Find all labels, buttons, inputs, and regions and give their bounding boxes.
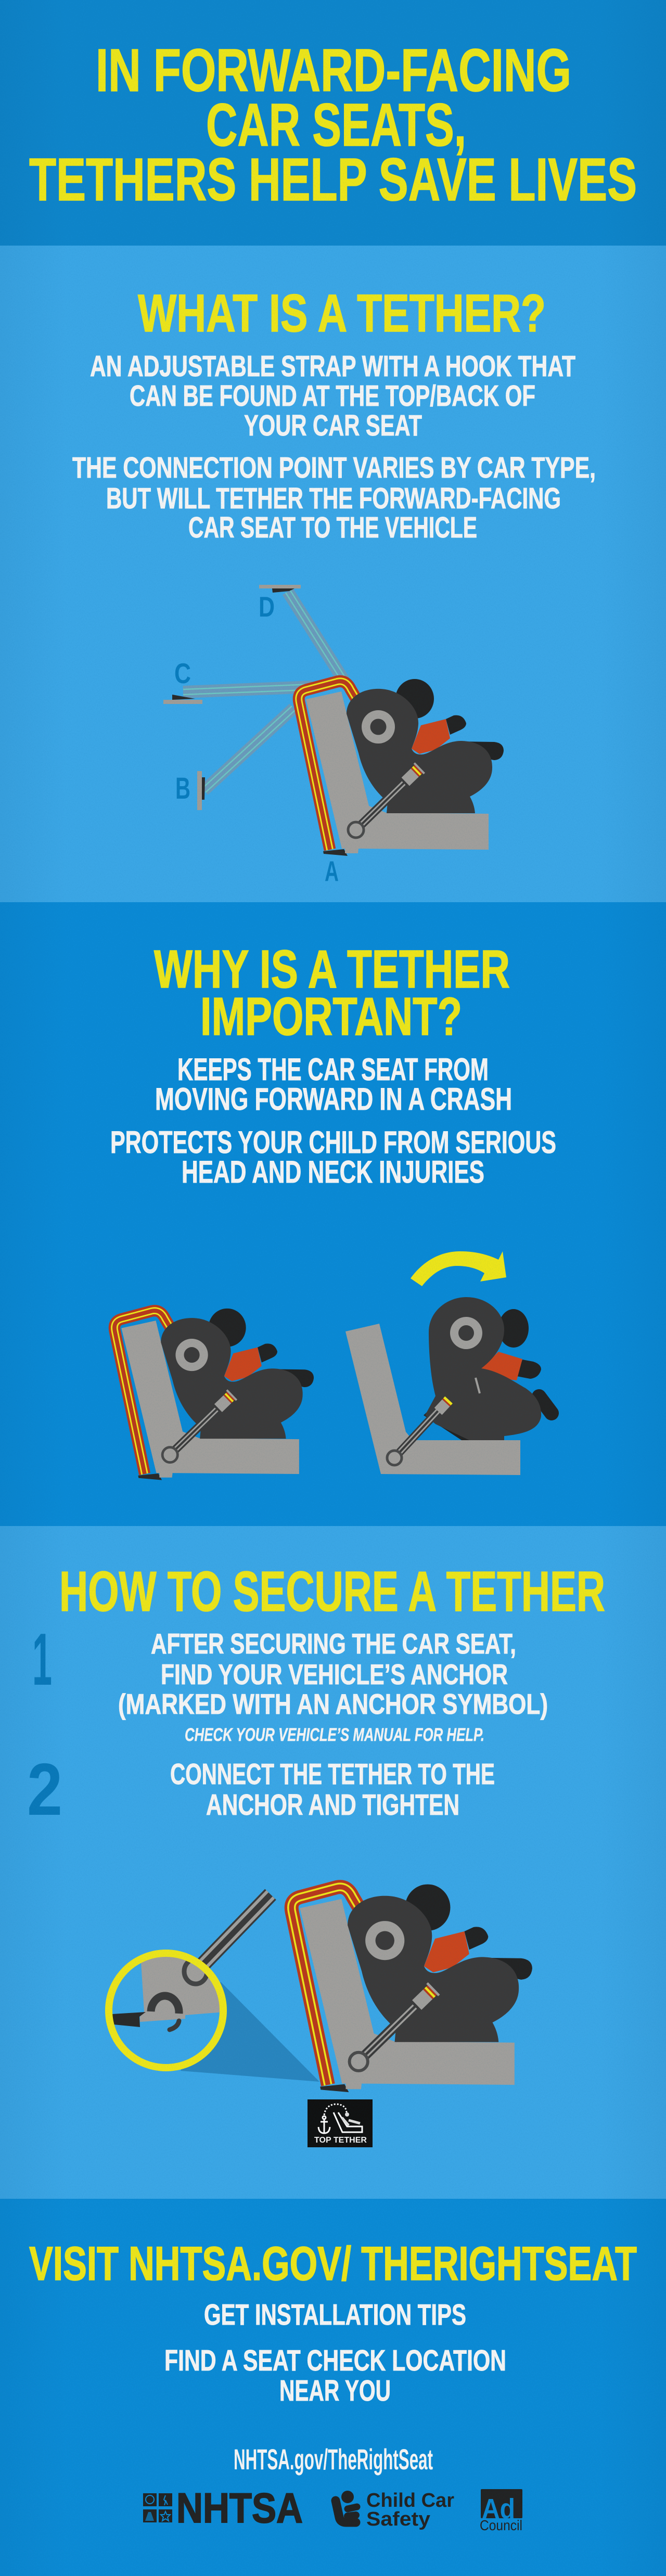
- text block: protects your child: HEAD AND NECK INJURIES: [182, 1155, 484, 1189]
- ad letters: Ad: [482, 2493, 515, 2524]
- lower anchor: [320, 2084, 349, 2092]
- magnifier shadow wedge: [181, 1982, 319, 2082]
- child seat icon: [336, 2491, 357, 2522]
- magnifier ring: [109, 1953, 223, 2068]
- text: url: NHTSA.gov/TheRightSeat: [234, 2443, 433, 2476]
- child's back hair: [405, 1885, 450, 1931]
- child car safety text: Child Car: [366, 2490, 454, 2511]
- child's foot: [457, 741, 504, 760]
- seat belt: [350, 2005, 416, 2071]
- child's hand: [517, 1360, 541, 1379]
- step number 2: 2: [27, 1748, 62, 1831]
- text: find a seat check location: NEAR YOU: [279, 2374, 391, 2407]
- child's shirt: [224, 1348, 262, 1381]
- ear: [365, 1921, 404, 1960]
- step 2 text: [170, 1758, 495, 1822]
- panel: why is a tether important background: [0, 902, 666, 1526]
- text block: tether definition: YOUR CAR SEAT: [244, 409, 422, 442]
- anchor close-up: [112, 1957, 220, 2032]
- tether ring: [184, 1959, 207, 1984]
- lower anchor: [323, 849, 348, 856]
- panel: how to secure a tether background: [0, 1526, 666, 2199]
- step 1 text: (MARKED WITH AN ANCHOR SYMBOL): [118, 1688, 548, 1720]
- child's hand: [446, 715, 466, 735]
- car seat: [121, 1321, 299, 1478]
- car seat: [345, 1324, 520, 1475]
- anchor C plate: [163, 695, 202, 704]
- NHTSA wordmark: NHTSA: [176, 2485, 303, 2532]
- heading: what is a tether: WHAT IS A TETHER?: [138, 284, 546, 343]
- top tether label: TOP TETHER: [314, 2136, 367, 2145]
- text block: keeps the seat from moving: [155, 1052, 512, 1117]
- seat outline: [334, 2112, 362, 2132]
- icon: child in car seat with tether: [291, 1885, 532, 2092]
- seat belt: [387, 1406, 443, 1465]
- tether hook: [112, 2012, 146, 2027]
- child's foot: [268, 1369, 314, 1387]
- logo: NHTSA: [143, 2485, 303, 2532]
- strap to anchor B: [202, 706, 295, 792]
- step 1 text: AFTER SECURING THE CAR SEAT,: [151, 1627, 516, 1660]
- child's hand: [258, 1343, 277, 1363]
- car seat: [306, 691, 489, 853]
- lower anchor: [138, 1473, 162, 1480]
- label B: B: [175, 772, 190, 805]
- child's hand: [464, 1927, 488, 1950]
- anchor D plate: [259, 585, 301, 593]
- step 1 text: [118, 1627, 548, 1720]
- vehicle panel: [140, 1957, 220, 2022]
- child's shirt: [412, 719, 450, 754]
- ear: [175, 1339, 208, 1371]
- icon: child in car seat with tether: [299, 679, 504, 856]
- title: [29, 36, 637, 213]
- text block: connection point: CAR SEAT TO THE VEHICLE: [188, 511, 477, 544]
- text block: keeps the seat from moving: KEEPS THE CAR SEAT FROM: [177, 1052, 489, 1087]
- belt buckle: [213, 1389, 237, 1413]
- child's back hair: [209, 1309, 246, 1347]
- text: get installation tips: GET INSTALLATION TIPS: [204, 2298, 466, 2331]
- child's body: [347, 689, 492, 813]
- disconnected tether strap: [193, 1891, 274, 1975]
- crease mark: [476, 1378, 480, 1393]
- step 1 text: FIND YOUR VEHICLE’S ANCHOR: [161, 1658, 508, 1690]
- anchor bar top: [151, 1996, 179, 2014]
- anchor: [318, 2116, 330, 2133]
- council word: Council: [480, 2517, 522, 2533]
- child car safety text: Safety: [366, 2508, 430, 2530]
- child's foot: [477, 1958, 532, 1980]
- child's back hair: [498, 1309, 529, 1348]
- text: find a seat check location: FIND A SEAT CHECK LOCATION: [164, 2344, 506, 2377]
- seat belt: [162, 1408, 218, 1463]
- strap to anchor C: [183, 684, 312, 695]
- ear: [362, 710, 395, 744]
- child's body: [425, 1297, 541, 1440]
- child's body: [348, 1896, 519, 2042]
- icon: untethered car seat pitching forward: [345, 1297, 552, 1475]
- panel: visit website background: [0, 2199, 666, 2576]
- icon: tethered car seat: [114, 1309, 314, 1480]
- label D: D: [259, 591, 275, 623]
- belt buckle: [411, 1982, 440, 2011]
- tether strap: [114, 1311, 173, 1474]
- seat shell underside: [424, 1410, 474, 1440]
- anchor bar bottom: [170, 2021, 179, 2030]
- car seat: [300, 1899, 515, 2089]
- panel: title band background: [0, 0, 666, 246]
- arrow: forward motion: [411, 1251, 506, 1286]
- belt buckle: [434, 1396, 453, 1415]
- step 2 text: CONNECT THE TETHER TO THE: [170, 1758, 495, 1791]
- tether strap: [291, 1887, 362, 2085]
- dotted arc: [324, 2104, 347, 2115]
- text block: protects your child: [110, 1125, 556, 1189]
- panel: what is a tether background: [0, 246, 666, 902]
- tether strap: [299, 681, 359, 850]
- child's foot: [539, 1396, 552, 1413]
- chart: tether anchor points A B C D: [163, 585, 504, 887]
- logo: Ad Council: [480, 2489, 522, 2533]
- ear: [450, 1317, 482, 1349]
- magnifier interior: [109, 1953, 223, 2068]
- label C: C: [174, 657, 191, 689]
- chart: connecting tether to anchor: [109, 1891, 319, 2082]
- text block: tether definition: [90, 350, 575, 442]
- child's back hair: [395, 679, 434, 719]
- step 2 text: ANCHOR AND TIGHTEN: [206, 1788, 459, 1822]
- text: 1: [32, 1618, 52, 1701]
- note: check your manual: CHECK YOUR VEHICLE’S MANUAL FOR HELP.: [185, 1725, 484, 1745]
- text block: connection point: [72, 451, 596, 544]
- belt buckle: [400, 762, 425, 787]
- seat belt: [348, 781, 405, 838]
- heading: why is a tether important: IMPORTANT?: [200, 986, 462, 1046]
- icon: top tether symbol: [308, 2099, 373, 2147]
- child's body: [161, 1318, 303, 1439]
- strap to anchor D: [286, 591, 347, 682]
- logo squares: [143, 2493, 172, 2522]
- title: CAR SEATS,: [206, 91, 466, 159]
- heading: why is a tether important: [154, 939, 510, 1046]
- anchor B plate: [197, 771, 205, 810]
- text block: tether definition: CAN BE FOUND AT THE TOP/BACK OF: [130, 379, 535, 413]
- heading: why is a tether important: WHY IS A TETHER: [154, 939, 510, 999]
- label A: A: [325, 855, 339, 887]
- text block: keeps the seat from moving: MOVING FORWARD IN A CRASH: [155, 1082, 512, 1117]
- child car safety text: [366, 2490, 454, 2530]
- child's shirt: [481, 1352, 522, 1380]
- logo: Child Car Safety: [336, 2490, 454, 2530]
- child outline: [342, 2112, 360, 2125]
- text: find a seat check location: [164, 2344, 506, 2407]
- child's shirt: [424, 1931, 469, 1972]
